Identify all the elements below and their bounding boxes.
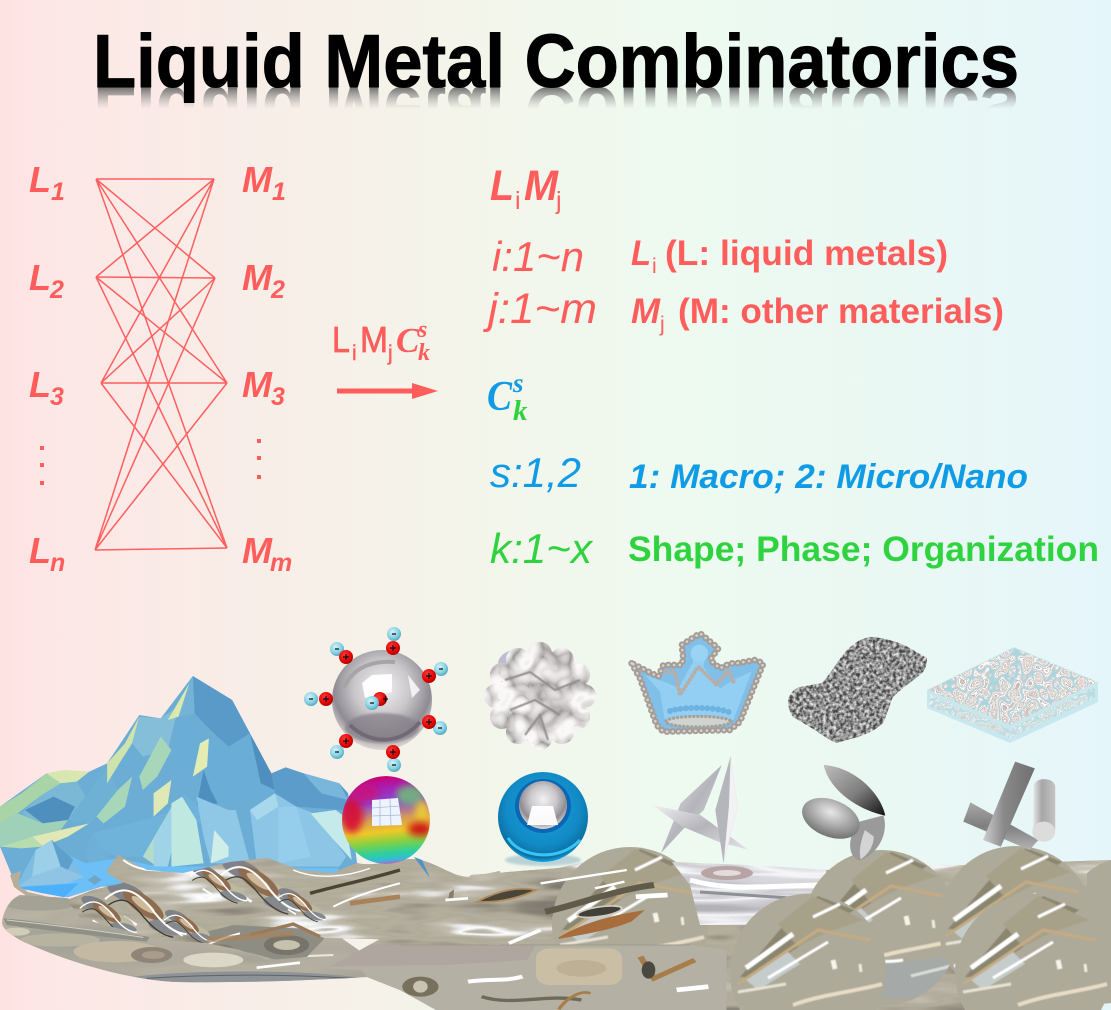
ion pairs (304, 627, 448, 772)
liquid metal surface (0, 846, 1111, 1010)
metal: dome one (552, 847, 708, 1003)
metal: dome three (730, 894, 886, 1010)
left labels L: 3 (50, 383, 64, 411)
metal: dome one details (541, 870, 668, 939)
other materials line: M (631, 292, 661, 331)
left labels L: L (29, 364, 51, 405)
title: Liquid Metal Combinatorics (93, 71, 1019, 155)
symbol C s k: k (513, 395, 528, 427)
metal: silver back sheet (672, 862, 826, 925)
crown shaped metal (632, 633, 763, 732)
panel: C definition (487, 368, 1099, 572)
blue shelled sphere (498, 772, 588, 866)
arrow label and arrow: L (332, 319, 350, 360)
silver spiky stars (652, 756, 749, 863)
metal: far right fragment (1060, 860, 1111, 1006)
metal: tile and streaks on right base (327, 945, 727, 1010)
other materials line: (M: other materials) (678, 292, 1004, 331)
symbol C s k: s (512, 368, 524, 398)
right labels M: m (270, 549, 292, 577)
water (18, 857, 343, 897)
left labels L: L (29, 530, 51, 571)
metal: dome four (938, 846, 1094, 1002)
panel: liquid metal to material network (29, 159, 292, 577)
arrow label and arrow (332, 317, 438, 399)
right labels M: 1 (272, 178, 286, 206)
right labels M (242, 159, 292, 577)
metal: streaks between band and first dome (445, 888, 542, 945)
right labels M: M (242, 364, 273, 405)
flower shadow (498, 650, 534, 678)
flower body (482, 640, 598, 752)
sphere reflections (344, 662, 420, 743)
silver ellipsoids (795, 765, 885, 861)
right labels M: M (242, 257, 273, 298)
heading LiMj: L (490, 162, 514, 210)
metal: left smooth pool (2, 895, 367, 982)
arrow label and arrow: k (418, 340, 430, 366)
right labels M: M (242, 530, 273, 571)
index j: j:1~m (483, 285, 597, 333)
silver rods (963, 762, 1055, 850)
rainbow coated sphere (341, 776, 432, 878)
charged sphere with ions (304, 627, 448, 772)
panel: LiMj definition (483, 162, 1004, 336)
symbol C s k (487, 368, 528, 427)
arrow label and arrow: j (387, 342, 393, 365)
heading LiMj (490, 162, 562, 215)
heading LiMj: i (515, 187, 521, 215)
silver sphere (332, 650, 432, 750)
index k: k:1~x (490, 525, 594, 572)
index i: i:1~n (492, 233, 584, 280)
metal: dome five (955, 894, 1111, 1010)
arrow label and arrow: C (396, 321, 420, 360)
left labels L (29, 159, 65, 577)
crown inner beads (665, 667, 735, 695)
left labels L: L (29, 257, 51, 298)
cracked metal plate in gel (925, 645, 1100, 743)
metal: busy wavy band (60, 850, 505, 960)
left labels L: n (50, 549, 65, 577)
title: Liquid Metal Combinatorics (93, 19, 1019, 103)
liquid metals line: i (652, 255, 657, 278)
other materials line: j (659, 313, 665, 336)
ellipsis dots (40, 439, 261, 485)
left labels L: 1 (51, 178, 65, 206)
heading LiMj: M (524, 162, 559, 210)
metal: dome two (803, 850, 959, 1006)
sphere window highlight (371, 798, 402, 826)
heading LiMj: j (555, 187, 562, 215)
macro micro nano: 1: Macro; 2: Micro/Nano (629, 458, 1028, 496)
pearl flower particle (482, 640, 598, 752)
metal: right base (360, 860, 1111, 1010)
crown outer beads (632, 633, 763, 732)
left labels L: 2 (49, 276, 64, 304)
metal: left sliver (10, 871, 62, 900)
left labels L: L (29, 159, 51, 200)
right labels M: M (242, 159, 273, 200)
title (93, 19, 1019, 155)
liquid metals line: (L: liquid metals) (665, 234, 948, 273)
arrow label and arrow: i (352, 342, 357, 365)
network lines (95, 179, 227, 550)
ion signs (309, 634, 443, 765)
right labels M: 3 (271, 383, 285, 411)
arrow label and arrow: M (360, 319, 388, 360)
index s: s:1,2 (490, 449, 581, 496)
crown base ring (666, 716, 731, 727)
right labels M: 2 (270, 276, 285, 304)
arrow label and arrow: s (417, 317, 427, 343)
blue tail (414, 857, 430, 878)
shape phase organization: Shape; Phase; Organization (628, 530, 1099, 569)
liquid metals line: L (631, 234, 651, 273)
symbol C s k: C (487, 374, 513, 420)
low-poly mountain (0, 676, 357, 897)
porous foam sponge (785, 635, 930, 745)
